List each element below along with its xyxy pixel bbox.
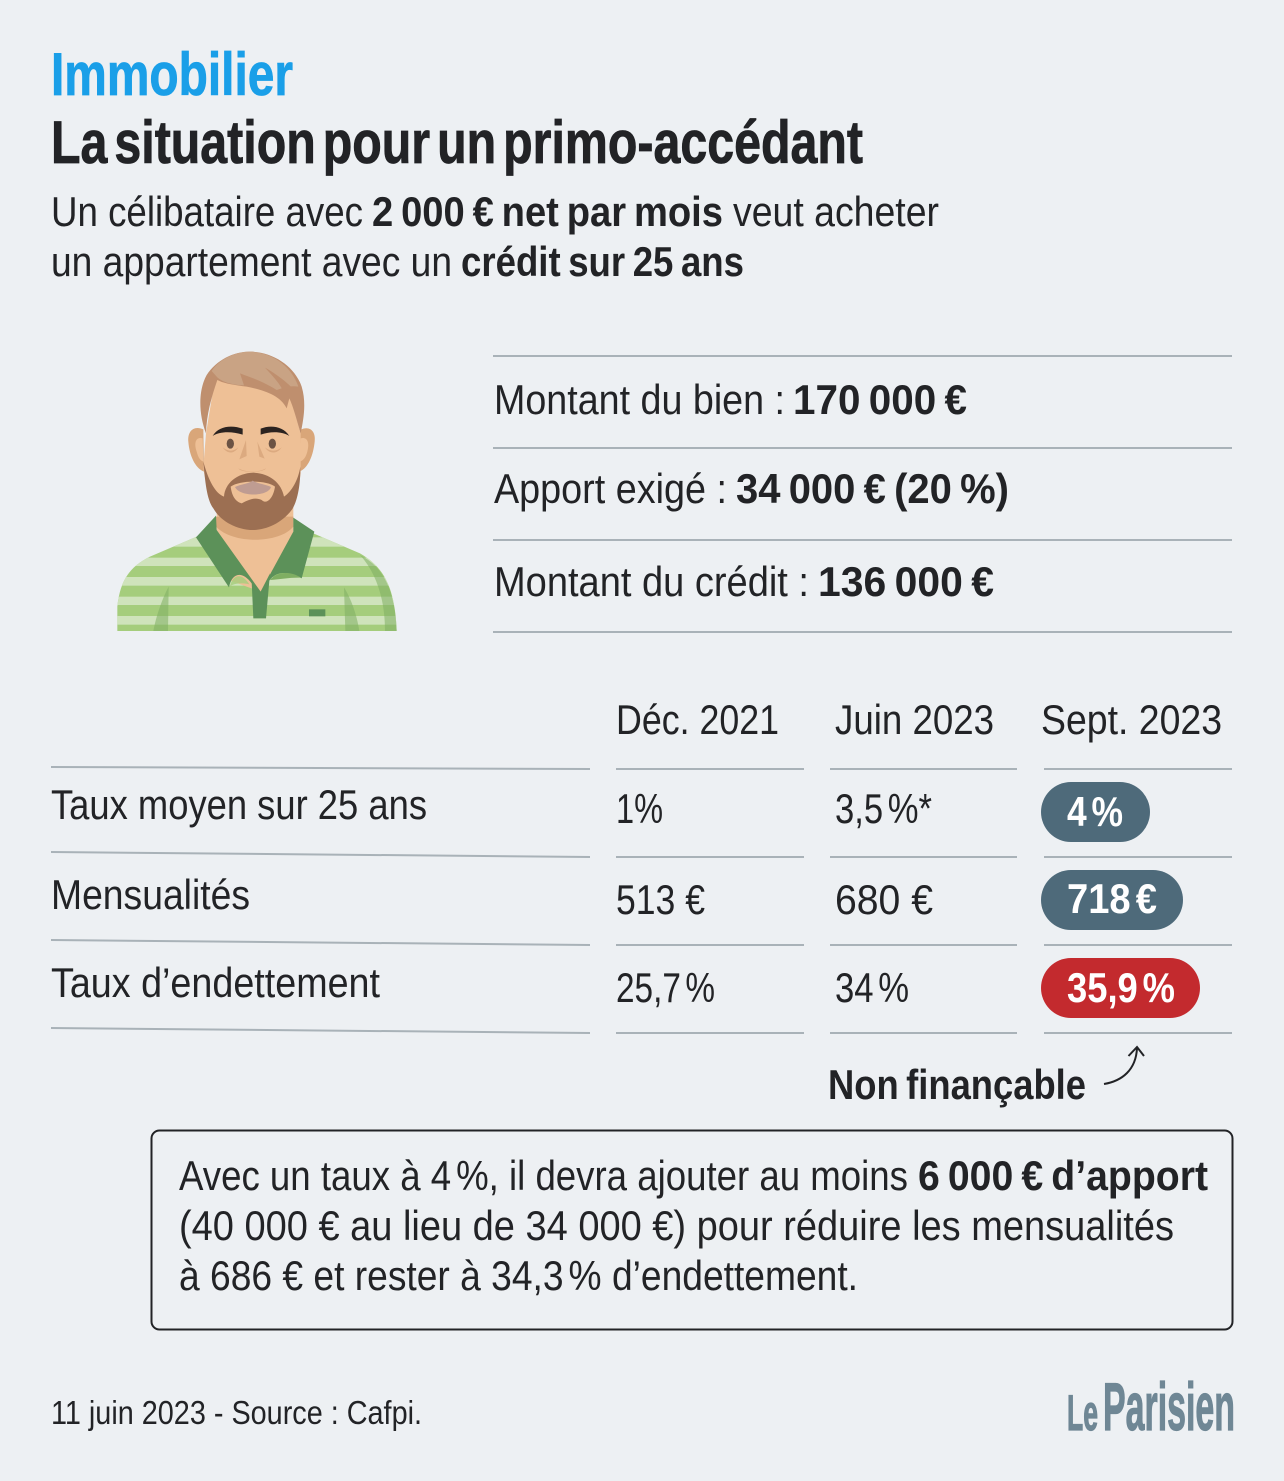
pocket <box>309 609 325 616</box>
row: debt ratio: Taux d’endettement <box>51 959 380 1006</box>
mouth <box>235 481 271 495</box>
row: average rate: Taux moyen sur 25 ans <box>51 781 427 828</box>
row: debt ratio: 35,9 % <box>1067 964 1175 1011</box>
table column headers: Juin 2023 <box>835 696 994 743</box>
row: monthly payments: 513 € <box>616 876 705 923</box>
table column headers: Sept. 2023 <box>1041 696 1222 743</box>
amount of property: 170 000 € <box>793 376 967 423</box>
panel: advice box: (40 000 € au lieu de 34 000 €) pour réduire les mensualités <box>179 1202 1174 1249</box>
loan amount <box>494 558 994 605</box>
title: La situation pour un primo-accédant <box>51 109 863 176</box>
row: average rate <box>51 781 1150 842</box>
row: debt ratio: 34 % <box>835 964 909 1011</box>
loan amount: Montant du crédit : <box>494 558 809 605</box>
row: average rate: 4 % <box>1067 788 1123 835</box>
placket and collar <box>252 573 270 618</box>
row: monthly payments: Mensualités <box>51 871 250 918</box>
logo: Le Parisien <box>1067 1369 1235 1445</box>
panel: advice box: Avec un taux à 4 %, il devra ajouter au moins <box>179 1152 908 1199</box>
amount of property <box>494 376 967 423</box>
neck <box>217 507 293 592</box>
subtitle <box>51 188 939 285</box>
panel: advice box <box>152 1130 1232 1330</box>
shirt shadows <box>153 587 169 631</box>
row: average rate: 1% <box>616 785 663 832</box>
required down payment: Apport exigé : <box>494 465 727 512</box>
callout: not financeable: Non finançable <box>828 1061 1086 1108</box>
heading: Immobilier: Immobilier <box>51 41 293 108</box>
face <box>203 378 301 527</box>
row: average rate: 3,5 %* <box>835 785 932 832</box>
row: debt ratio: 25,7 % <box>616 964 715 1011</box>
eyes <box>227 439 234 449</box>
subtitle: 2 000 € net par mois <box>372 188 723 235</box>
shirt body <box>117 533 397 631</box>
table: rates by date <box>51 696 1232 1033</box>
source: 11 juin 2023 - Source : Cafpi. <box>51 1394 422 1431</box>
amount of property: Montant du bien : <box>494 376 785 423</box>
row: monthly payments <box>51 870 1183 930</box>
ears <box>188 428 204 472</box>
eyebrows <box>213 427 243 436</box>
arrow <box>1104 1047 1144 1084</box>
panel: loan summary <box>493 356 1232 632</box>
icon: bearded man in striped polo <box>113 352 400 631</box>
subtitle: crédit sur 25 ans <box>461 238 744 285</box>
logo: Le Parisien: Le <box>1067 1385 1098 1441</box>
row: debt ratio <box>51 958 1200 1018</box>
subtitle: Un célibataire avec <box>51 188 363 235</box>
row: monthly payments: 718 € <box>1067 875 1157 922</box>
panel: advice box: 6 000 € d’apport <box>918 1152 1208 1199</box>
required down payment <box>494 465 1009 512</box>
table column headers: Déc. 2021 <box>616 696 779 743</box>
hair <box>200 352 304 433</box>
required down payment: 34 000 € (20 %) <box>736 465 1009 512</box>
loan amount: 136 000 € <box>818 558 994 605</box>
nose <box>239 440 247 459</box>
table column headers <box>616 696 1222 743</box>
subtitle: veut acheter <box>733 188 939 235</box>
row: monthly payments: 680 € <box>835 876 933 923</box>
subtitle: un appartement avec un <box>51 238 452 285</box>
beard <box>203 462 300 530</box>
shirt stripes <box>113 537 400 625</box>
panel: advice box: à 686 € et rester à 34,3 % d’endettement. <box>179 1252 858 1299</box>
